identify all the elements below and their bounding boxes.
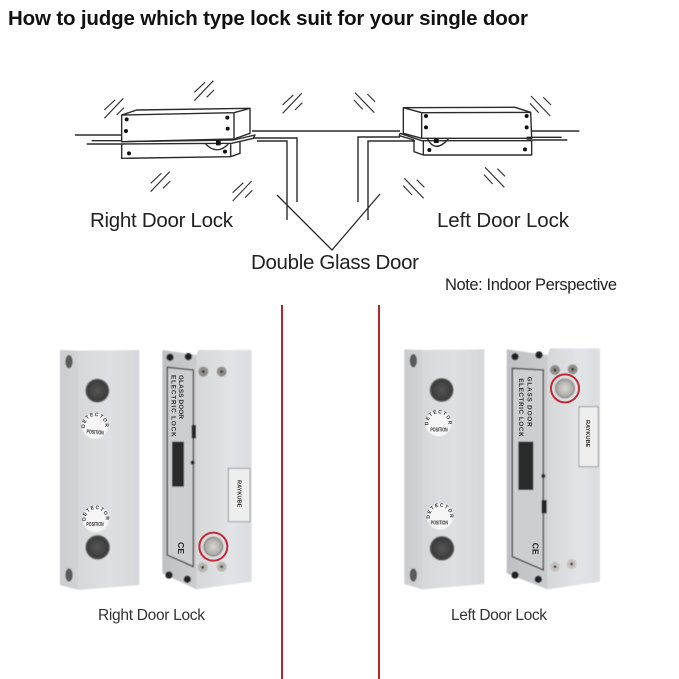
diagram: double glass door top view	[75, 81, 579, 250]
strike plate: POSITION	[86, 429, 104, 437]
photo: right door lock	[60, 350, 252, 590]
strike plate: DETECTOR	[82, 506, 110, 521]
lock body: CE	[530, 543, 540, 555]
caption: left door lock: Left Door Lock	[451, 607, 547, 624]
lock body: CE	[176, 542, 186, 554]
label: left door lock (diagram): Left Door Lock	[437, 209, 570, 232]
strike plate: DETECTOR	[81, 412, 108, 428]
lock body	[162, 350, 252, 589]
lock body: GLASS DOOR	[177, 375, 184, 419]
strike plate: DETECTOR	[424, 410, 452, 425]
lock body: GLASS DOOR	[526, 377, 533, 427]
strike plate	[60, 350, 140, 590]
right door lock drawing	[75, 81, 302, 201]
door frame lines	[252, 131, 415, 220]
left door lock drawing	[354, 93, 579, 198]
strike plate: POSITION	[431, 520, 448, 526]
lock body: RAYKUBE	[236, 480, 242, 508]
pointer lines to double glass door	[277, 194, 380, 250]
lock body	[507, 348, 600, 589]
lock body: RAYKUBE	[584, 420, 590, 448]
divider: red line left	[281, 305, 283, 679]
red highlight: button position	[199, 533, 227, 561]
strike plate: POSITION	[430, 427, 448, 433]
label: right door lock (diagram): Right Door Lock	[90, 209, 234, 232]
red highlight: button position	[551, 374, 579, 402]
photo: left door lock	[404, 348, 600, 590]
strike plate: POSITION	[86, 522, 104, 528]
lock body: ELECTRIC LOCK	[170, 375, 177, 437]
label: double glass door: Double Glass Door	[251, 251, 419, 274]
strike plate	[404, 349, 485, 590]
caption: right door lock: Right Door Lock	[98, 607, 205, 624]
note: indoor perspective: Note: Indoor Perspective	[445, 276, 617, 294]
lock body: ELECTRIC LOCK	[517, 378, 524, 437]
strike plate: DETECTOR	[426, 503, 454, 518]
title: How to judge which type lock suit for your single door	[8, 7, 528, 30]
divider: red line right	[378, 305, 380, 679]
